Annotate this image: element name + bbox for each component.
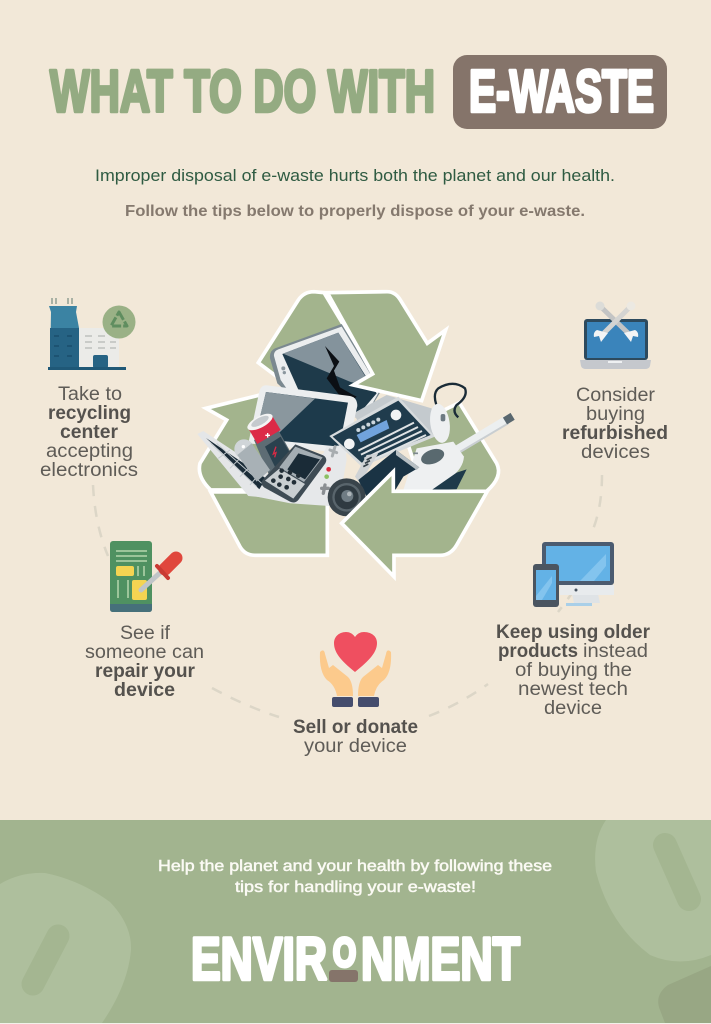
tip: repair <box>85 541 204 701</box>
icon: hands holding heart <box>320 632 391 707</box>
recycling arrow: top <box>327 292 446 401</box>
intro text <box>95 166 615 220</box>
tip: keep using older products <box>496 542 651 719</box>
title badge: e-waste <box>453 55 667 129</box>
mouse and cable <box>428 384 466 444</box>
icon: laptop with wrenches <box>580 302 651 369</box>
tip: recycling center <box>40 298 138 481</box>
camera lens <box>328 478 366 516</box>
footer shape: left blob <box>0 873 131 1023</box>
label: refurbished: refurbished <box>562 423 668 444</box>
dashed connector arcs <box>93 475 602 717</box>
footer message: tips for handling your e-waste! <box>235 879 476 896</box>
keyboard laptop <box>197 431 272 498</box>
game controller <box>255 445 347 507</box>
label: keep using: products <box>498 641 578 662</box>
label: keep using: of buying the <box>515 660 632 681</box>
recycling arrow: left <box>199 292 377 490</box>
intro text: Improper disposal of e-waste hurts both the planet and our health. <box>95 166 615 185</box>
logo: environment: O <box>333 931 356 975</box>
footer panel <box>0 820 711 1024</box>
label: repair <box>85 623 204 701</box>
label: keep using: Keep using older <box>496 622 651 643</box>
label: refurbished: devices <box>581 442 650 463</box>
label: refurbished <box>562 385 668 463</box>
logo: environment: NMENT <box>361 926 520 992</box>
icon: circuit board with dropper <box>110 541 176 612</box>
label: keep using: device <box>544 698 602 719</box>
logo: environment <box>191 926 520 992</box>
cracked tablet screen <box>248 385 357 453</box>
tube light <box>457 416 513 452</box>
mobile phone <box>262 444 326 503</box>
controller buttons <box>322 447 337 493</box>
label: keep using <box>496 622 651 719</box>
footer message: Help the planet and your health by following these <box>158 858 552 875</box>
label: repair: repair your <box>95 661 196 682</box>
iron <box>403 442 467 490</box>
radio <box>329 397 435 467</box>
label: repair: device <box>114 680 175 701</box>
footer shape: dark corner <box>658 966 711 1023</box>
recycling arrow: bottom right <box>342 472 487 577</box>
label: refurbished: Consider <box>576 385 656 406</box>
label: recycling center <box>40 384 138 481</box>
logo: environment: ENVIR <box>191 926 327 992</box>
title: WHAT TO DO WITH <box>50 58 435 124</box>
battery <box>245 410 295 477</box>
tip: refurbished <box>562 302 668 463</box>
label: repair: See if <box>120 623 171 644</box>
footer message <box>158 858 552 896</box>
label: sell or donate: your device <box>304 736 407 757</box>
label: keep using: newest tech <box>518 679 628 700</box>
label: sell or donate: Sell or donate <box>293 717 418 738</box>
label: repair: someone can <box>85 642 204 663</box>
camera body <box>355 450 419 497</box>
label: keep using: instead <box>583 641 648 662</box>
label: sell or donate <box>293 717 418 757</box>
label: recycling center: recycling <box>48 403 131 424</box>
icon: monitor and phone <box>533 542 614 607</box>
label: recycling center: accepting <box>46 441 133 462</box>
icon: factory <box>48 298 136 370</box>
tip: sell or donate <box>293 632 418 757</box>
recycling symbol with e-waste pile <box>197 292 513 577</box>
label: recycling center: Take to <box>58 384 122 405</box>
intro text: Follow the tips below to properly dispose of your e-waste. <box>125 203 585 220</box>
label: recycling center: center <box>60 422 119 443</box>
broken tablet <box>270 324 382 420</box>
radio backing panel <box>353 395 433 453</box>
footer shape: right blob <box>595 820 711 962</box>
recycling arrow: bottom left <box>211 492 327 555</box>
recycling arrow: right tail <box>403 403 499 491</box>
label: refurbished: buying <box>586 404 645 425</box>
label: recycling center: electronics <box>40 460 138 481</box>
